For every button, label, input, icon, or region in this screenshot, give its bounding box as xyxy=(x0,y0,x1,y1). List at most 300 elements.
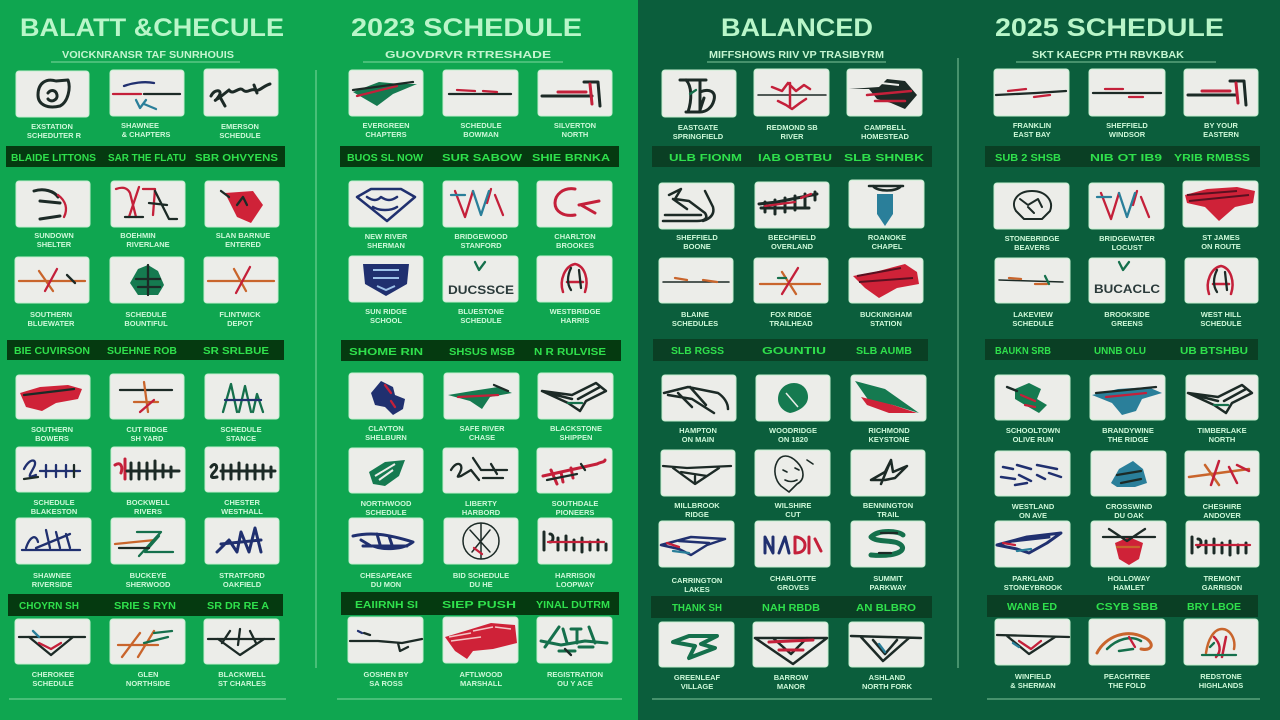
logo card 10 xyxy=(662,375,736,444)
title: BALANCED xyxy=(721,14,873,42)
logo card 2 xyxy=(1089,69,1165,139)
logo card 2 xyxy=(443,70,518,139)
logo card 11 xyxy=(1090,375,1165,444)
logo card 15: CHESTER xyxy=(224,498,260,507)
logo card 15 xyxy=(205,447,279,516)
band 3: SIEP PUSH xyxy=(442,600,516,611)
logo card 14 xyxy=(755,450,830,519)
band 2: SHOME RIN xyxy=(349,347,423,358)
band 2 xyxy=(985,339,1258,360)
logo card 8: DUCSSCE xyxy=(448,283,514,297)
subtitle: MIFFSHOWS RIIV VP TRASIBYRM xyxy=(709,49,884,61)
logo card 2: SHEFFIELD xyxy=(1106,121,1148,130)
logo card 11: SH YARD xyxy=(131,434,164,443)
logo card 12: BLACKSTONE xyxy=(550,424,602,433)
logo card 8: FOX RIDGE xyxy=(770,310,812,319)
logo card 6 xyxy=(1183,181,1258,251)
logo card 5: LOCUST xyxy=(1112,243,1143,252)
logo card 14: RIVERS xyxy=(134,507,162,516)
logo card 20: PEACHTREE xyxy=(1104,672,1150,681)
logo card 21: ASHLAND xyxy=(869,673,906,682)
logo card 12: SCHEDULE xyxy=(220,425,262,434)
logo card 14: DU OAK xyxy=(1114,511,1144,520)
logo card 14: BOCKWELL xyxy=(126,498,170,507)
logo card 5: BEECHFIELD xyxy=(768,233,817,242)
logo card 17: SHERWOOD xyxy=(126,580,171,589)
logo card 21: REGISTRATION xyxy=(547,670,603,679)
logo card 8: BLUESTONE xyxy=(458,307,504,316)
logo card 13: MILLBROOK xyxy=(674,501,720,510)
logo card 5: BRIDGEWOOD xyxy=(454,232,508,241)
band 3: NAH RBDB xyxy=(762,603,820,614)
logo card 9: STATION xyxy=(870,319,902,328)
logo card 4: BEAVERS xyxy=(1014,243,1050,252)
logo card 10: OLIVE RUN xyxy=(1013,435,1053,444)
logo card 3: EASTERN xyxy=(1203,130,1239,139)
logo card 20 xyxy=(753,622,828,691)
logo card 14 xyxy=(1091,451,1166,520)
band 2: BAUKN SRB xyxy=(995,346,1051,357)
logo card 8: SCHEDULE xyxy=(125,310,167,319)
panel: right balanced column xyxy=(651,14,932,699)
logo card 9: FLINTWICK xyxy=(219,310,261,319)
logo card 15: WESTHALL xyxy=(221,507,263,516)
logo card 15: TRAIL xyxy=(877,510,899,519)
logo card 14: HARBORD xyxy=(462,508,501,517)
logo card 16 xyxy=(995,521,1070,592)
logo card 18: SUMMIT xyxy=(873,574,903,583)
logo card 6: CHARLTON xyxy=(554,232,596,241)
logo card 18: STRATFORD xyxy=(219,571,265,580)
logo card 13: RIDGE xyxy=(685,510,709,519)
panel: left balanced schedule column xyxy=(6,14,286,699)
logo card 18: HARRISON xyxy=(555,571,595,580)
logo card 18 xyxy=(205,518,279,589)
logo card 18: LOOPWAY xyxy=(556,580,594,589)
logo card 9: SCHEDULE xyxy=(1200,319,1242,328)
logo card 15: PIONEERS xyxy=(556,508,594,517)
logo card 14 xyxy=(443,448,518,517)
logo card 13 xyxy=(661,450,735,519)
logo card 17 xyxy=(111,518,185,589)
logo card 7: SUN RIDGE xyxy=(365,307,407,316)
band 3: THANK SH xyxy=(672,603,722,614)
logo card 15 xyxy=(1185,451,1259,520)
band 3 xyxy=(987,595,1258,617)
logo card 11: CHASE xyxy=(469,433,495,442)
logo card 16 xyxy=(349,518,423,589)
logo card 9: BUCKINGHAM xyxy=(860,310,912,319)
logo card 11 xyxy=(444,373,519,442)
logo card 4: NEW RIVER xyxy=(365,232,408,241)
band 1: SUB 2 SHSB xyxy=(995,153,1061,164)
logo card 11: BRANDYWINE xyxy=(1102,426,1154,435)
band 3: YINAL DUTRM xyxy=(536,600,610,611)
logo card 19: CHEROKEE xyxy=(32,670,74,679)
logo card 8 xyxy=(754,258,828,328)
logo card 2: RIVER xyxy=(781,132,804,141)
logo card 17: DU HE xyxy=(469,580,493,589)
band 1 xyxy=(985,146,1260,167)
logo card 7 xyxy=(995,258,1070,328)
logo card 14: CROSSWIND xyxy=(1106,502,1153,511)
band 3: CHOYRN SH xyxy=(19,601,79,612)
logo card 16: LAKES xyxy=(684,585,710,594)
logo card 7: BLUEWATER xyxy=(28,319,75,328)
logo card 2: & CHAPTERS xyxy=(122,130,170,139)
logo card 17 xyxy=(1091,521,1166,592)
band 2: SLB RGSS xyxy=(671,346,724,357)
logo card 12 xyxy=(538,373,613,442)
logo card 6: ROANOKE xyxy=(868,233,906,242)
logo card 7: SCHOOL xyxy=(370,316,402,325)
band 3: BRY LBOE xyxy=(1187,602,1241,613)
logo card 19: GOSHEN BY xyxy=(363,670,409,679)
logo card 16: STONEYBROOK xyxy=(1004,583,1063,592)
logo card 14 xyxy=(111,447,185,516)
logo card 15: BENNINGTON xyxy=(863,501,913,510)
logo card 2: WINDSOR xyxy=(1109,130,1146,139)
logo card 19 xyxy=(15,619,90,688)
logo card 3: NORTH xyxy=(562,130,588,139)
logo card 7: BLAINE xyxy=(681,310,709,319)
logo card 6 xyxy=(537,181,612,250)
logo card 1: CHAPTERS xyxy=(365,130,407,139)
title: 2025 SCHEDULE xyxy=(995,14,1224,42)
logo card 2 xyxy=(110,70,184,139)
logo card 7: SCHEDULES xyxy=(672,319,718,328)
logo card 10: SHELBURN xyxy=(365,433,407,442)
logo card 12: NORTH xyxy=(1209,435,1235,444)
band 2: SLB AUMB xyxy=(856,346,912,357)
logo card 19: SA ROSS xyxy=(369,679,403,688)
logo card 15 xyxy=(851,450,925,519)
logo card 6: CHAPEL xyxy=(872,242,903,251)
logo card 9 xyxy=(1185,258,1258,328)
title: BALATT &CHECULE xyxy=(20,14,284,42)
logo card 21 xyxy=(849,622,924,691)
logo card 19: VILLAGE xyxy=(681,682,713,691)
logo card 8: TRAILHEAD xyxy=(769,319,813,328)
logo card 9: WEST HILL xyxy=(1201,310,1242,319)
logo card 18 xyxy=(851,521,925,592)
logo card 6: SLAN BARNUE xyxy=(216,231,270,240)
logo card 18: OAKFIELD xyxy=(223,580,262,589)
band 2: SUEHNE ROB xyxy=(107,346,177,357)
logo card 20: BARROW xyxy=(774,673,809,682)
logo card 17 xyxy=(444,518,518,589)
logo card 17: HAMLET xyxy=(1113,583,1145,592)
logo card 3 xyxy=(847,69,922,141)
panel: right 2025 schedule column xyxy=(985,14,1260,699)
band 2 xyxy=(653,339,928,361)
logo card 8 xyxy=(443,256,518,325)
band 2: SHSUS MSB xyxy=(449,347,515,358)
band 1: SAR THE FLATU xyxy=(108,153,186,164)
logo card 8: SCHEDULE xyxy=(460,316,502,325)
logo card 5: BRIDGEWATER xyxy=(1099,234,1155,243)
band 3: EAIIRNH SI xyxy=(355,600,418,611)
logo card 3: SILVERTON xyxy=(554,121,596,130)
logo card 10: SCHOOLTOWN xyxy=(1006,426,1060,435)
logo card 9 xyxy=(849,258,923,328)
logo card 21: BLACKWELL xyxy=(218,670,266,679)
logo card 9: DEPOT xyxy=(227,319,253,328)
logo card 6: ENTERED xyxy=(225,240,261,249)
band 3: AN BLBRO xyxy=(856,603,916,614)
logo card 12: TIMBERLAKE xyxy=(1197,426,1247,435)
logo card 13: ON AVE xyxy=(1019,511,1047,520)
logo card 12: SHIPPEN xyxy=(560,433,592,442)
band 1: YRIB RMBSS xyxy=(1174,153,1250,164)
logo card 4: BOONE xyxy=(683,242,711,251)
logo card 8 xyxy=(1089,258,1165,328)
logo card 16: SHAWNEE xyxy=(33,571,71,580)
logo card 12: KEYSTONE xyxy=(868,435,910,444)
logo card 18: TREMONT xyxy=(1203,574,1241,583)
logo card 6 xyxy=(849,180,924,251)
logo card 17: HOLLOWAY xyxy=(1108,574,1150,583)
band 2 xyxy=(7,340,284,360)
band 2: BIE CUVIRSON xyxy=(14,346,90,357)
logo card 13: SCHEDULE xyxy=(365,508,407,517)
logo card 21: OU Y ACE xyxy=(557,679,593,688)
logo card 21 xyxy=(537,617,612,688)
logo card 21 xyxy=(1184,619,1258,690)
logo card 19 xyxy=(659,622,734,691)
logo card 17: GROVES xyxy=(777,583,809,592)
logo card 12 xyxy=(205,374,279,443)
logo card 11: CUT RIDGE xyxy=(126,425,168,434)
logo card 5: STANFORD xyxy=(460,241,502,250)
logo card 2: BOWMAN xyxy=(463,130,499,139)
logo card 16 xyxy=(16,518,91,589)
logo card 16: RIVERSIDE xyxy=(32,580,72,589)
logo card 16: DU MON xyxy=(371,580,401,589)
logo card 1: EASTGATE xyxy=(678,123,718,132)
logo card 10: SOUTHERN xyxy=(31,425,73,434)
logo card 11 xyxy=(756,375,830,444)
logo card 16: CHESAPEAKE xyxy=(360,571,412,580)
logo card 10: ON MAIN xyxy=(682,435,714,444)
logo card 11: ON 1820 xyxy=(778,435,808,444)
logo card 10: HAMPTON xyxy=(679,426,717,435)
logo card 14: CUT xyxy=(785,510,801,519)
band 1: SUR SABOW xyxy=(442,153,523,164)
logo card 21: ST CHARLES xyxy=(218,679,266,688)
logo card 14: LIBERTY xyxy=(465,499,497,508)
logo card 6: BROOKES xyxy=(556,241,594,250)
band 3 xyxy=(651,596,932,618)
logo card 1: SCHEDUTER R xyxy=(27,131,82,140)
logo card 10 xyxy=(16,375,90,443)
logo card 3: EMERSON xyxy=(221,122,259,131)
band 3: SR DR RE A xyxy=(207,601,269,612)
logo card 20: MARSHALL xyxy=(460,679,502,688)
band 2: GOUNTIU xyxy=(762,346,826,357)
logo card 3: SCHEDULE xyxy=(219,131,261,140)
logo card 7 xyxy=(15,257,89,328)
logo card 20: THE FOLD xyxy=(1108,681,1146,690)
logo card 17: CHARLOTTE xyxy=(770,574,816,583)
logo card 16 xyxy=(659,521,734,594)
logo card 10: BOWERS xyxy=(35,434,69,443)
logo card 13 xyxy=(349,448,423,517)
band 1 xyxy=(652,146,932,167)
logo card 18 xyxy=(1186,521,1259,592)
logo card 9 xyxy=(537,256,612,325)
band 3 xyxy=(341,592,619,615)
logo card 4: STONEBRIDGE xyxy=(1005,234,1059,243)
logo card 1: SPRINGFIELD xyxy=(673,132,724,141)
logo card 15: SOUTHDALE xyxy=(552,499,598,508)
logo card 13: WESTLAND xyxy=(1012,502,1055,511)
logo card 3 xyxy=(204,69,278,140)
logo card 12 xyxy=(851,375,926,444)
logo card 19: SCHEDULE xyxy=(32,679,74,688)
logo card 4 xyxy=(16,181,90,249)
logo card 21 xyxy=(204,619,279,688)
logo card 3: BY YOUR xyxy=(1204,121,1239,130)
logo card 20 xyxy=(110,619,185,688)
band 2: N R RULVISE xyxy=(534,347,606,358)
logo card 7 xyxy=(349,256,423,325)
band 1: IAB OBTBU xyxy=(758,153,832,164)
logo card 20: MANOR xyxy=(777,682,806,691)
logo card 2: SCHEDULE xyxy=(460,121,502,130)
band 1: SBR OHVYENS xyxy=(195,153,278,164)
band 2: UNNB OLU xyxy=(1094,346,1146,357)
band 2: UB BTSHBU xyxy=(1180,346,1248,357)
logo card 6 xyxy=(205,181,279,249)
logo card 3: HOMESTEAD xyxy=(861,132,910,141)
logo card 2 xyxy=(754,69,829,141)
logo card 4 xyxy=(659,183,734,251)
logo card 1 xyxy=(994,69,1069,139)
title: 2023 SCHEDULE xyxy=(351,14,582,42)
logo card 21: HIGHLANDS xyxy=(1199,681,1243,690)
subtitle: VOICKNRANSR TAF SUNRHOUIS xyxy=(62,49,234,61)
logo card 14: WILSHIRE xyxy=(775,501,811,510)
band 3: CSYB SBB xyxy=(1096,602,1158,613)
logo card 5: OVERLAND xyxy=(771,242,814,251)
logo card 1 xyxy=(662,70,736,141)
band 1: SHIE BRNKA xyxy=(532,153,610,164)
logo card 5 xyxy=(1089,183,1164,252)
logo card 8: BOUNTIFUL xyxy=(124,319,168,328)
logo card 20 xyxy=(1089,619,1165,690)
logo card 3 xyxy=(538,70,612,139)
logo card 13: BLAKESTON xyxy=(31,507,77,516)
logo card 12: STANCE xyxy=(226,434,256,443)
logo card 19 xyxy=(348,617,423,688)
logo card 10 xyxy=(995,375,1070,444)
logo card 9 xyxy=(204,257,278,328)
band 1 xyxy=(340,146,619,167)
logo card 4: SHEFFIELD xyxy=(676,233,718,242)
logo card 19: GREENLEAF xyxy=(674,673,721,682)
logo card 13 xyxy=(995,451,1070,520)
logo card 18 xyxy=(538,518,612,589)
logo card 7: LAKEVIEW xyxy=(1013,310,1054,319)
logo card 20: NORTHSIDE xyxy=(126,679,170,688)
logo card 1 xyxy=(16,71,89,140)
logo card 9: WESTBRIDGE xyxy=(550,307,600,316)
logo card 3: CAMPBELL xyxy=(864,123,906,132)
band 1: BUOS SL NOW xyxy=(347,153,424,164)
logo card 16: PARKLAND xyxy=(1012,574,1054,583)
logo card 19: WINFIELD xyxy=(1015,672,1052,681)
band 1: SLB SHNBK xyxy=(844,153,925,164)
logo card 13 xyxy=(16,447,91,516)
logo card 10 xyxy=(349,373,423,442)
logo card 4 xyxy=(994,183,1069,252)
logo card 12 xyxy=(1186,375,1258,444)
logo card 7: SOUTHERN xyxy=(30,310,72,319)
logo card 11 xyxy=(110,374,184,443)
logo card 2: REDMOND SB xyxy=(766,123,818,132)
subtitle: SKT KAECPR PTH RBVKBAK xyxy=(1032,49,1184,61)
logo card 15: ANDOVER xyxy=(1203,511,1241,520)
logo card 4 xyxy=(349,181,423,250)
logo card 5: BOEHMIN xyxy=(120,231,156,240)
logo card 4: SHELTER xyxy=(37,240,72,249)
logo card 4: SUNDOWN xyxy=(34,231,74,240)
logo card 18: PARKWAY xyxy=(869,583,907,592)
band 1: ULB FIONM xyxy=(669,153,742,164)
logo card 3 xyxy=(1184,69,1258,139)
logo card 10: CLAYTON xyxy=(368,424,404,433)
logo card 8: BROOKSIDE xyxy=(1104,310,1150,319)
logo card 6: ON ROUTE xyxy=(1201,242,1241,251)
logo card 5 xyxy=(443,181,518,250)
logo card 20: GLEN xyxy=(138,670,158,679)
logo card 1: FRANKLIN xyxy=(1013,121,1051,130)
logo card 11: THE RIDGE xyxy=(1108,435,1148,444)
logo card 19 xyxy=(995,619,1070,690)
logo card 20 xyxy=(443,617,518,688)
logo card 8 xyxy=(110,257,184,328)
band 2 xyxy=(341,340,621,361)
band 3: SRIE S RYN xyxy=(114,601,176,612)
logo card 7: SCHEDULE xyxy=(1012,319,1054,328)
logo card 1: EXSTATION xyxy=(31,122,73,131)
band 2: SR SRLBUE xyxy=(203,346,269,357)
logo card 16: CARRINGTON xyxy=(672,576,722,585)
logo card 1: EVERGREEN xyxy=(362,121,410,130)
logo card 21: REDSTONE xyxy=(1200,672,1242,681)
logo card 7 xyxy=(659,258,733,328)
logo card 8: GREENS xyxy=(1111,319,1143,328)
band 1: BLAIDE LITTONS xyxy=(11,153,96,164)
logo card 1: EAST BAY xyxy=(1013,130,1051,139)
logo card 11: WOODRIDGE xyxy=(769,426,817,435)
band 3 xyxy=(8,594,283,616)
logo card 4: SHERMAN xyxy=(367,241,405,250)
band 1 xyxy=(6,146,285,167)
logo card 21: NORTH FORK xyxy=(862,682,913,691)
logo card 17 xyxy=(755,521,830,592)
logo card 17: BID SCHEDULE xyxy=(453,571,509,580)
logo card 11: SAFE RIVER xyxy=(459,424,505,433)
panel: left 2023 schedule column xyxy=(337,14,622,699)
logo card 5 xyxy=(755,182,829,251)
logo card 15: CHESHIRE xyxy=(1203,502,1241,511)
logo card 19: & SHERMAN xyxy=(1010,681,1056,690)
logo card 2: SHAWNEE xyxy=(121,121,159,130)
logo card 9: HARRIS xyxy=(561,316,589,325)
logo card 5 xyxy=(111,181,185,249)
